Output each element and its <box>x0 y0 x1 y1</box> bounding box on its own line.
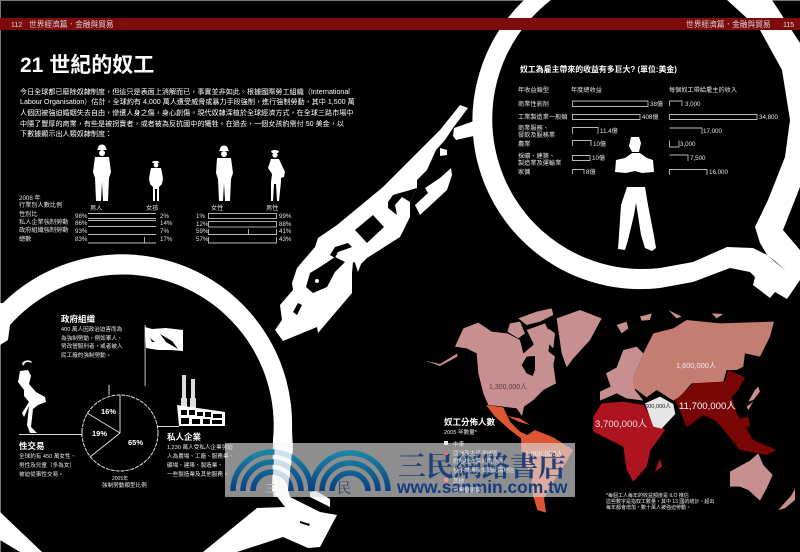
title: 21 世紀的奴工 <box>20 54 154 77</box>
icon: flag <box>145 325 183 386</box>
pie chart: 19% <box>92 429 107 438</box>
map legend: 2005 年數量* <box>444 428 478 436</box>
map legend <box>444 417 515 494</box>
panel: employer profit table: 38億 <box>650 100 663 108</box>
government heading and text: 政府組織 <box>61 314 96 324</box>
map footnote: 這些數字是指奴工數量，其中 13 國的統計，超出 <box>606 498 714 505</box>
panel: employer profit table: 7,500 <box>690 155 706 162</box>
bars: women and men: 1% <box>196 213 205 220</box>
panel: employer profit table: 家傭 <box>518 168 530 176</box>
bars: men and girls: 98% <box>75 213 88 220</box>
government heading and text <box>61 314 123 359</box>
table: share by gender and age <box>19 194 292 243</box>
watermark: sanmin bookstore: 三民網路書店 <box>398 451 566 483</box>
bars: women and men: 59% <box>196 228 209 235</box>
panel: employer profit table: 3,000 <box>685 101 701 108</box>
bars: women and men: 88% <box>279 221 292 228</box>
map legend: 已開發國家 <box>453 486 481 494</box>
russia and central asia <box>633 320 774 401</box>
panel: employer profit table: 16,000 <box>709 169 728 176</box>
bars: men and girls: 2% <box>160 213 169 220</box>
latin america <box>486 405 573 513</box>
header bar: 世界經濟篇．金融與貿易 <box>686 19 771 29</box>
panel: employer profit table: 408億 <box>642 113 659 121</box>
panel: employer profit table: 10億 <box>592 154 605 162</box>
bars: per person <box>670 101 757 175</box>
south america value label: 1,800,000人 <box>525 450 563 458</box>
panel: employer profit table: 每個奴工帶給雇主的收入 <box>669 86 737 94</box>
bars: men and girls: 86% <box>75 220 88 227</box>
sex trade text <box>19 441 76 478</box>
pie chart: 16% <box>101 407 116 416</box>
panel: employer profit table: 10億 <box>593 140 606 148</box>
sex trade text: 全球約有 450 萬女性、 <box>19 452 76 460</box>
sex trade text: 男性及兒童（多為女） <box>19 461 75 469</box>
north america and oceania pale regions <box>425 308 795 510</box>
map value labels: 600,000人 <box>645 403 671 410</box>
private enterprise text: 1,230 萬人受私人企業強迫 <box>167 443 233 451</box>
table: share by gender and age: 總數 <box>19 235 31 243</box>
table: share by gender and age: 性別比 <box>19 210 38 218</box>
bars: women and men: 43% <box>279 236 292 243</box>
private enterprise text <box>167 432 234 478</box>
panel: employer profit table: 採礦、建築、 <box>518 152 555 160</box>
bars: women and men: 41% <box>279 228 292 235</box>
handcuff: bottom left ring <box>0 254 337 552</box>
watermark: sanmin bookstore: 三 <box>265 483 276 495</box>
africa <box>593 402 665 482</box>
bars: total <box>572 101 648 174</box>
map value labels: 3,700,000人 <box>595 419 648 430</box>
pie chart: 2005年 <box>112 475 128 482</box>
intro text block: 下數據顯示出人類奴隸制度： <box>20 129 112 138</box>
panel: employer profit table: 製造業及運輸業 <box>518 159 561 167</box>
panel: employer profit table <box>518 64 778 251</box>
map legend: 中東 <box>453 440 465 448</box>
south and east asia <box>675 370 777 455</box>
bars: men and girls: 7% <box>160 228 169 235</box>
bars: men and girls: 17% <box>160 236 173 243</box>
bars: women and men <box>196 213 292 243</box>
panel: employer profit table: 17,000 <box>703 128 722 135</box>
map legend: 奴工分佈人數 <box>444 417 496 427</box>
bars: men and girls: 93% <box>75 228 88 235</box>
header bar: 115 <box>783 22 794 29</box>
intro text block: Labour Organisation）估計，全球約有 4,000 萬人遭受威脅或暴力手段強制，進行強制勞動，其中 1,500 萬 <box>20 97 355 106</box>
private enterprise text: 人為農場、工廠、服務業、 <box>167 452 234 460</box>
icon: woman <box>268 150 285 201</box>
panel: employer profit table: 年度總收益 <box>571 86 602 94</box>
watermark: sanmin bookstore <box>225 443 575 497</box>
map value labels <box>489 361 736 430</box>
table: share by gender and age: 2008 年 <box>19 194 41 202</box>
intro text block: 今日全球都已廢除奴隸制度，但這只是表面上消解而已，事實並非如此。根據國際勞工組織（International <box>20 87 350 96</box>
panel: employer profit table: 商業服務、 <box>518 124 549 132</box>
intro text block: 中隱了豐厚的商業，有些是被拐賣者，或者被為反抗國中的犧牲。在過去，一個女孩約需付 50 美金，以 <box>20 119 344 128</box>
pie chart: 強制勞動類型比例 <box>102 481 147 489</box>
middle east <box>645 397 675 429</box>
pie chart: 65% <box>128 438 143 447</box>
icon: slave owner with crossed arms <box>615 137 656 251</box>
icon: factory <box>177 375 225 426</box>
table: share by gender and age: 女孩 <box>146 204 158 212</box>
intro text block: 人個因被強迫婚姻失去自由，慘遭人身之傷，身心創傷。現代奴隸深植於全球經濟方式，在全球三路市場中 <box>20 108 353 117</box>
panel: employer profit table: 餐飲及服務業 <box>518 131 555 139</box>
intro text block <box>20 87 355 138</box>
sex trade text: 被迫從事性交易。 <box>19 470 64 478</box>
map legend: 亞洲及太平洋地區 <box>453 449 498 457</box>
bars: men and girls: 83% <box>75 236 88 243</box>
government heading and text: 勞改營服刑者，或者被人 <box>61 342 123 350</box>
map legend: 撒哈拉沙漠以南非洲 <box>453 457 504 465</box>
map legend: 拉丁美洲及加勒比海地區 <box>453 466 515 474</box>
header bar: 世界經濟篇．金融與貿易 <box>29 19 114 29</box>
map footnote <box>606 492 714 511</box>
table: share by gender and age: 男人 <box>90 205 102 212</box>
logo arches <box>233 452 388 491</box>
icon: man 2 <box>216 146 233 201</box>
bars: women and men: 12% <box>196 221 209 228</box>
panel: employer profit table: 工業製造業一般類 <box>518 113 568 121</box>
left page number and running head: 112 <box>11 22 22 29</box>
icon: woman silhouette <box>18 360 46 433</box>
world map <box>425 308 795 513</box>
panel: employer profit table: 34,800 <box>759 114 778 121</box>
panel: employer profit table: 商業性剝削 <box>518 100 549 108</box>
icon: man worker <box>93 145 111 201</box>
panel: forced labour by sector <box>18 314 234 489</box>
watermark: sanmin bookstore: 民 <box>337 481 351 497</box>
private enterprise text: 礦場、建築、製造業、 <box>167 461 223 469</box>
table: share by gender and age: 男性 <box>266 204 278 212</box>
heading: 奴工為雇主帶來的收益有多巨大? (單位:美金) <box>520 64 677 74</box>
government heading and text: 民工廠的強制勞動。 <box>61 351 111 359</box>
map value labels: 1,600,000人 <box>676 361 717 370</box>
private enterprise text: 一些製造業及其他服務。 <box>167 470 229 478</box>
bars: men and girls <box>75 213 173 243</box>
bars: women and men: 57% <box>196 236 209 243</box>
table: share by gender and age: 政府組織強制勞動 <box>19 226 68 234</box>
bars: women and men: 99% <box>279 213 292 220</box>
panel: employer profit table: 農業 <box>518 140 530 148</box>
private enterprise text: 私人企業 <box>167 432 202 442</box>
government heading and text: 400 萬人因政治迫害而為 <box>61 325 123 333</box>
map footnote: *每個工人每年的收益額度是 ILO 推估 <box>606 492 689 499</box>
handcuff: top right ring <box>472 0 800 299</box>
government heading and text: 為強制勞動，例如軍人、 <box>61 334 123 342</box>
panel: employer profit table: 年收益類型 <box>518 86 549 94</box>
sex trade text: 性交易 <box>19 441 45 451</box>
panel: employer profit table: 3,000 <box>680 141 696 148</box>
table: share by gender and age: 私人企業強制勞動 <box>19 218 68 226</box>
pie chart <box>19 385 179 489</box>
map legend: 其他 <box>453 477 465 485</box>
icon: girl <box>149 161 163 201</box>
map footnote: 每年都會增加，數十萬人被強迫勞動。 <box>606 504 691 511</box>
map value labels: 1,300,000人 <box>489 383 527 391</box>
chain linking the two handcuffs <box>275 105 478 341</box>
header bar <box>0 18 800 30</box>
map value labels: 11,700,000人 <box>679 401 736 412</box>
table: share by gender and age: 行業別人數比例 <box>19 201 62 209</box>
panel: employer profit table: 8億 <box>586 168 596 176</box>
watermark: sanmin bookstore: www.sanmin.com.tw <box>396 477 568 497</box>
bars: men and girls: 14% <box>160 220 173 227</box>
panel: employer profit table: 11.4億 <box>600 127 618 135</box>
table: share by gender and age: 女性 <box>211 204 223 212</box>
